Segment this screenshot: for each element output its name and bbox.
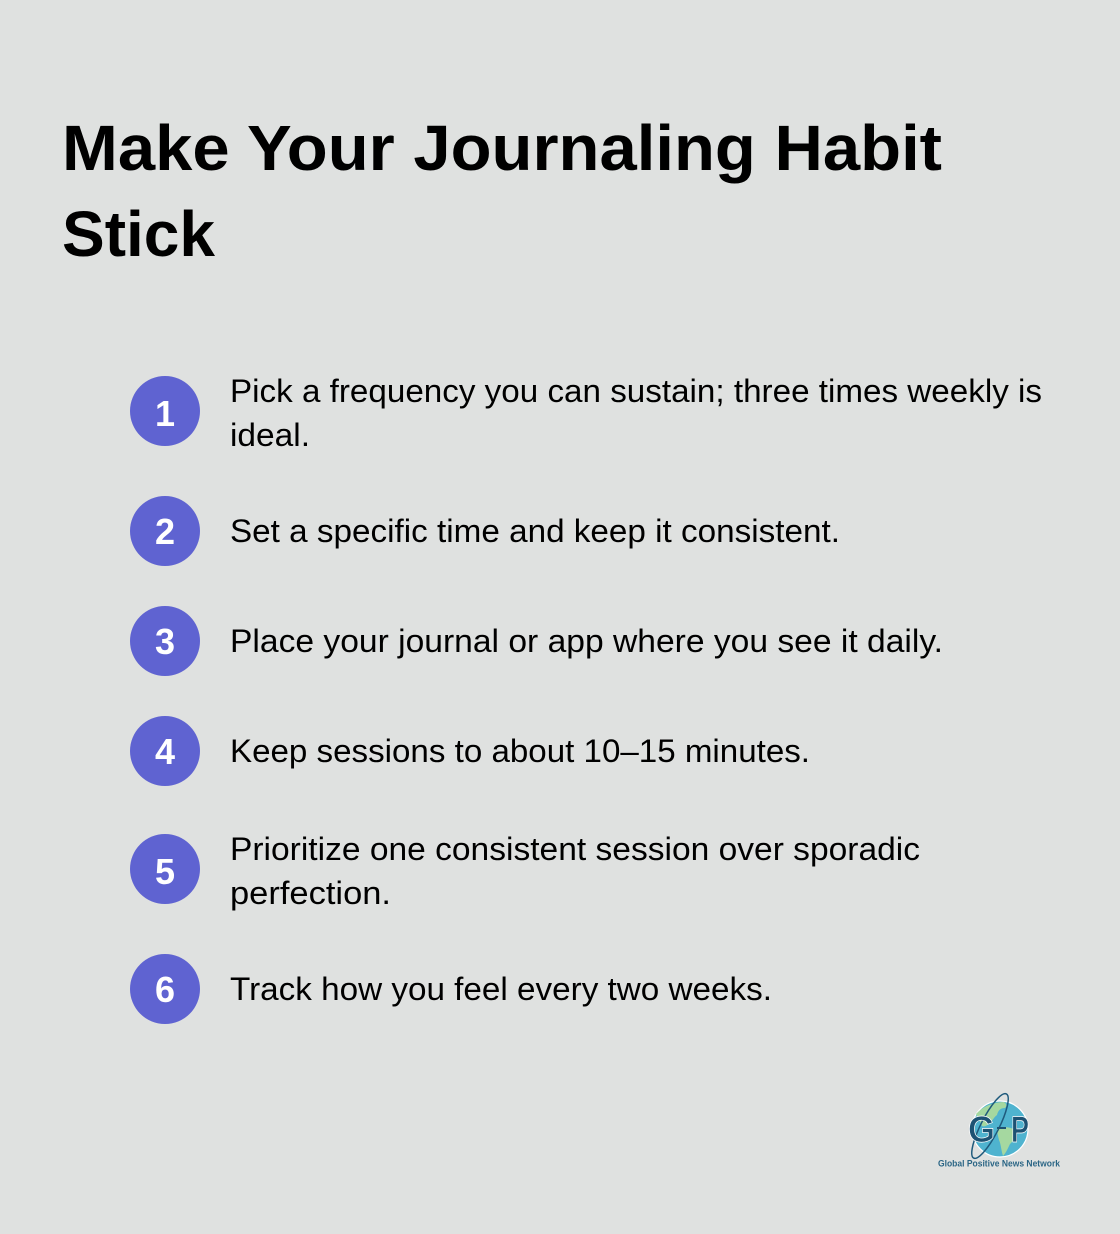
step 4 xyxy=(130,716,810,786)
step 3 text: Place your journal or app where you see it daily. xyxy=(230,623,943,659)
step 5 text: Prioritize one consistent session over sporadic xyxy=(230,831,920,867)
number badge 6 xyxy=(130,954,200,1024)
step 1 text: ideal. xyxy=(230,417,310,453)
number badge 5 xyxy=(130,834,200,904)
icon: globe: P xyxy=(1011,1109,1029,1150)
title xyxy=(62,112,942,270)
number badge 3 xyxy=(130,606,200,676)
title: Stick xyxy=(62,198,215,270)
number badge 2 xyxy=(130,496,200,566)
step 5 text xyxy=(230,831,920,911)
step 1 text xyxy=(230,373,1042,453)
number badge 4: 4 xyxy=(155,731,175,772)
step 5 xyxy=(130,831,920,911)
step 3 xyxy=(130,606,943,676)
step 2 xyxy=(130,496,840,566)
step 6 xyxy=(130,954,772,1024)
step 1 xyxy=(130,373,1042,453)
number badge 2: 2 xyxy=(155,511,175,552)
number badge 3: 3 xyxy=(155,621,175,662)
step 2 text: Set a specific time and keep it consistent. xyxy=(230,513,840,549)
logo: Global Positive News Network xyxy=(938,1090,1061,1170)
step 1 text: Pick a frequency you can sustain; three times weekly is xyxy=(230,373,1042,409)
step 4 text: Keep sessions to about 10–15 minutes. xyxy=(230,733,810,769)
icon: globe xyxy=(966,1090,1029,1162)
title: Make Your Journaling Habit xyxy=(62,112,942,184)
step 6 text: Track how you feel every two weeks. xyxy=(230,971,772,1007)
number badge 6: 6 xyxy=(155,969,175,1010)
icon: globe: G xyxy=(968,1109,995,1150)
number badge 4 xyxy=(130,716,200,786)
number badge 5: 5 xyxy=(155,851,175,892)
step 5 text: perfection. xyxy=(230,875,391,911)
number badge 1: 1 xyxy=(155,393,175,434)
logo wordmark: Global Positive News Network xyxy=(938,1158,1061,1170)
number badge 1 xyxy=(130,376,200,446)
